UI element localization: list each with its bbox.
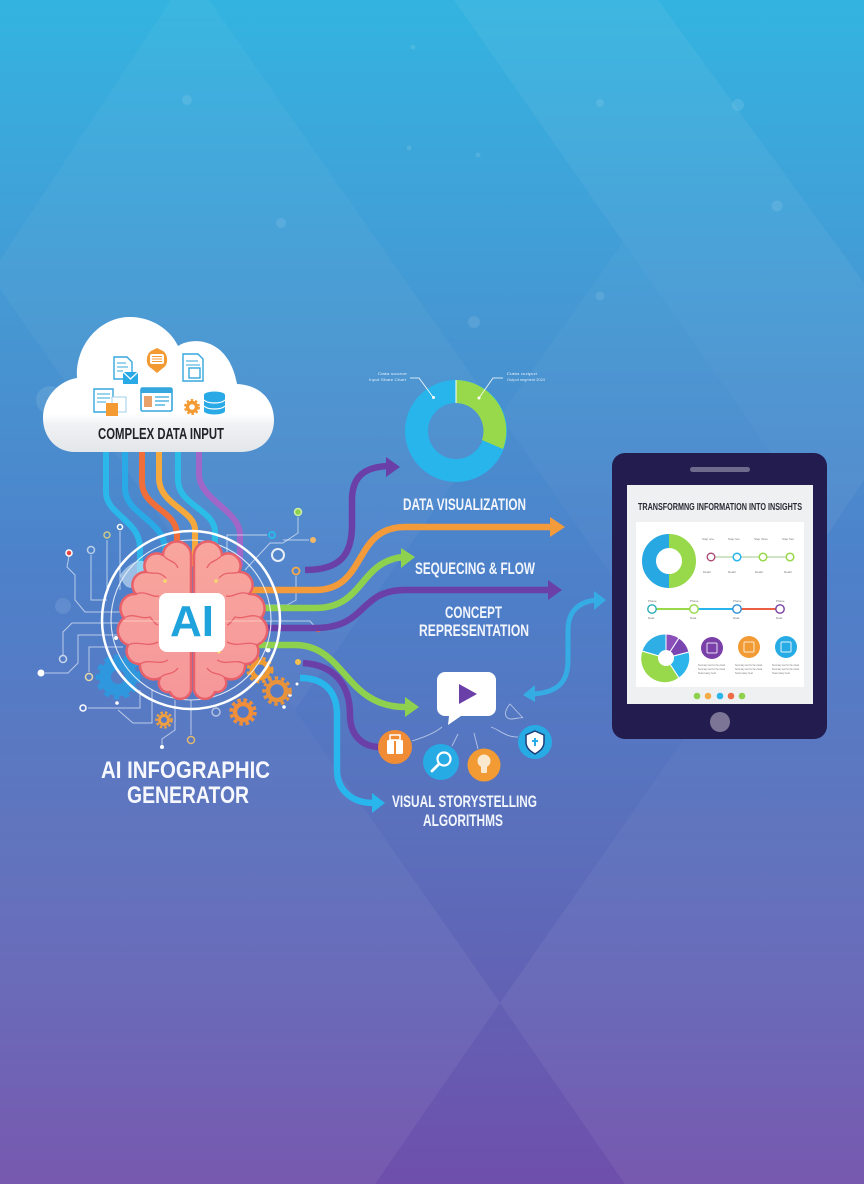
donut left caption: Data source [378,371,408,376]
arrow: green to sequencing and flow [258,548,415,608]
donut left caption [369,371,408,382]
label: concept representation: REPRESENTATION [419,622,529,640]
tablet pie chart [641,634,690,683]
icon: large blue gear [98,657,138,697]
brain left hemisphere [118,542,191,699]
icon: spreadsheet document [183,354,203,381]
donut right caption: Output segment 2024 [507,377,546,382]
heading: complex data input: COMPLEX DATA INPUT [98,426,224,443]
label: sequencing and flow: SEQUECING & FLOW [415,560,535,578]
AI chip [159,593,225,652]
label: concept representation [419,604,529,640]
tablet icon captions: Summary text for the visual [735,667,762,671]
label: concept representation: CONCEPT [445,604,502,622]
tablet timeline top: Step four [782,537,794,541]
screen content panel [636,522,804,687]
donut left caption: Input Share Chart [369,377,407,382]
icon: database [204,392,225,414]
tablet icon captions: Summary text for the visual [698,667,725,671]
title [101,757,270,809]
icon: report with table [94,389,126,416]
icon: small orange gear [156,712,172,728]
label: visual storytelling algorithms: ALGORITHMS [423,812,503,830]
icon: magnifier circle [423,744,459,780]
tablet timeline bottom: Data [648,616,655,620]
icon: orange gear lower [231,700,255,724]
title: GENERATOR [127,782,249,809]
tablet icon captions: Summary text for the visual [772,667,799,671]
icon: video play bubble [437,672,496,725]
tablet icon captions: Summary text [772,671,790,675]
outer ring [102,531,280,709]
tablet timeline bottom: Phase [733,599,742,603]
tablet timeline top: Step two [728,537,740,541]
tablet [612,453,827,739]
tablet timeline top: Detail [728,570,736,574]
tablet timeline bottom: Phase [690,599,699,603]
donut right caption [507,371,546,382]
tablet icon captions: Summary text [698,671,716,675]
connector lines to storytelling icons [412,704,523,749]
tablet timeline bottom [648,599,785,620]
icon: orange chat bubble [147,348,167,373]
tablet donut chart [649,541,689,581]
circuit nodes [38,508,320,749]
tablet timeline bottom: Phase [776,599,785,603]
label: visual storytelling algorithms: VISUAL STORYSTELLING [392,793,537,811]
tablet pagination dots [694,693,745,699]
icon: orange gear [185,400,199,414]
arrow: two-way blue arrow [523,591,606,702]
tablet timeline top: Step three [754,537,768,541]
background bokeh dots [36,44,782,614]
tablet timeline top: Detail [784,570,792,574]
gears [98,657,290,728]
tablet timeline bottom: Phase [648,599,657,603]
donut chart: data visualization [369,371,546,470]
tablet icon captions: Summary text for the visual [698,663,725,667]
tablet icon captions: Summary text [735,671,753,675]
tablet timeline bottom: Data [733,616,740,620]
tablet body [612,453,827,739]
tablet icon circles [701,636,797,659]
tablet timeline top: Detail [703,570,711,574]
arrow: to data visualization [305,457,400,570]
tablet timeline bottom: Data [776,616,783,620]
tablet screen [627,485,813,704]
icon: shield circle [518,725,552,759]
icon: orange gear behind ring [248,658,272,682]
tablet timeline top: Step one [702,537,714,541]
tablet home button [710,712,730,732]
icon: lightbulb circle [468,748,500,782]
tablet icon captions: Summary text for the visual [772,663,799,667]
circuit lines around brain [45,517,316,745]
label: visual storytelling algorithms [392,793,537,830]
arrow: green to video [255,645,419,717]
tablet timeline bottom: Data [690,616,697,620]
donut right caption: Data output [507,371,538,376]
tablet speaker [690,467,750,472]
glow cluster [120,561,148,588]
arrow: orange long arrow [250,517,565,590]
brain sparks [163,579,221,654]
donut callouts [410,378,503,398]
icon: document with envelope [114,357,138,384]
tablet timeline top [702,537,794,574]
title: AI INFOGRAPHIC [101,757,270,784]
label: data visualization: DATA VISUALIZATION [403,496,526,514]
arrow: purple to concept representation [258,580,562,628]
AI label: AI [170,597,214,646]
tablet icon captions [698,663,799,675]
brain right hemisphere [194,542,267,699]
icon: orange gear right [264,678,290,704]
icon: orange briefcase circle [378,730,412,764]
cloud: complex data input [43,317,274,452]
arrow: blue to storytelling [300,678,385,813]
brain [118,542,267,699]
arrow: purple to icons [303,663,380,747]
tablet timeline top: Detail [755,570,763,574]
icon: browser window [141,388,172,411]
data pipes from cloud to brain [106,450,240,590]
tablet icon captions: Summary text for the visual [735,663,762,667]
